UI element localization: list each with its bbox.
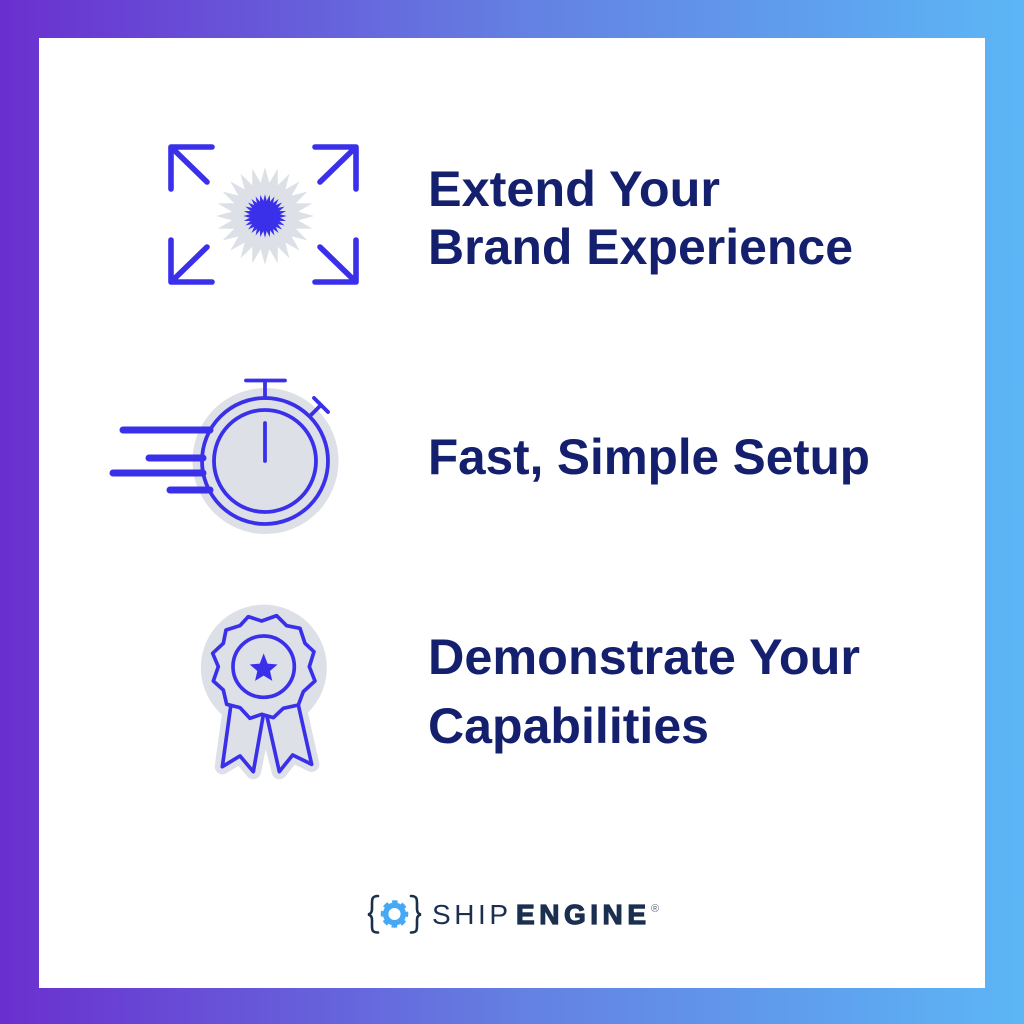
grey starburst <box>216 167 314 265</box>
inner ring <box>233 636 294 697</box>
star <box>250 653 278 681</box>
icon: stopwatch with speed lines <box>113 380 338 534</box>
grey backing <box>201 605 327 772</box>
registered mark: ® <box>651 903 659 915</box>
heading: Extend Your Brand Experience: Brand Experience <box>428 219 853 275</box>
icon: expanding arrows with starburst <box>171 147 356 282</box>
logo gear <box>382 902 406 926</box>
blue starburst <box>243 194 287 238</box>
heading: Extend Your Brand Experience: Extend Your <box>428 161 720 217</box>
grey disc <box>192 388 338 534</box>
wordmark SHIP: SHIP <box>432 899 508 930</box>
four corner arrows <box>171 147 356 282</box>
heading: Demonstrate Your Capabilities <box>428 629 860 754</box>
scalloped rosette <box>213 616 315 718</box>
logo: ShipEngine <box>368 896 659 932</box>
icon: award ribbon rosette <box>201 605 327 772</box>
ribbon tails <box>222 705 312 772</box>
heading: Fast, Simple Setup: Fast, Simple Setup <box>428 429 870 485</box>
heading: Demonstrate Your Capabilities: Capabilities <box>428 698 709 754</box>
heading: Demonstrate Your Capabilities: Demonstrate Your <box>428 629 860 685</box>
watch body <box>202 380 328 524</box>
heading: Extend Your Brand Experience <box>428 161 853 275</box>
speed lines <box>113 430 210 490</box>
wordmark ENGINE: ENGINE <box>516 899 646 930</box>
logo braces <box>368 896 421 932</box>
